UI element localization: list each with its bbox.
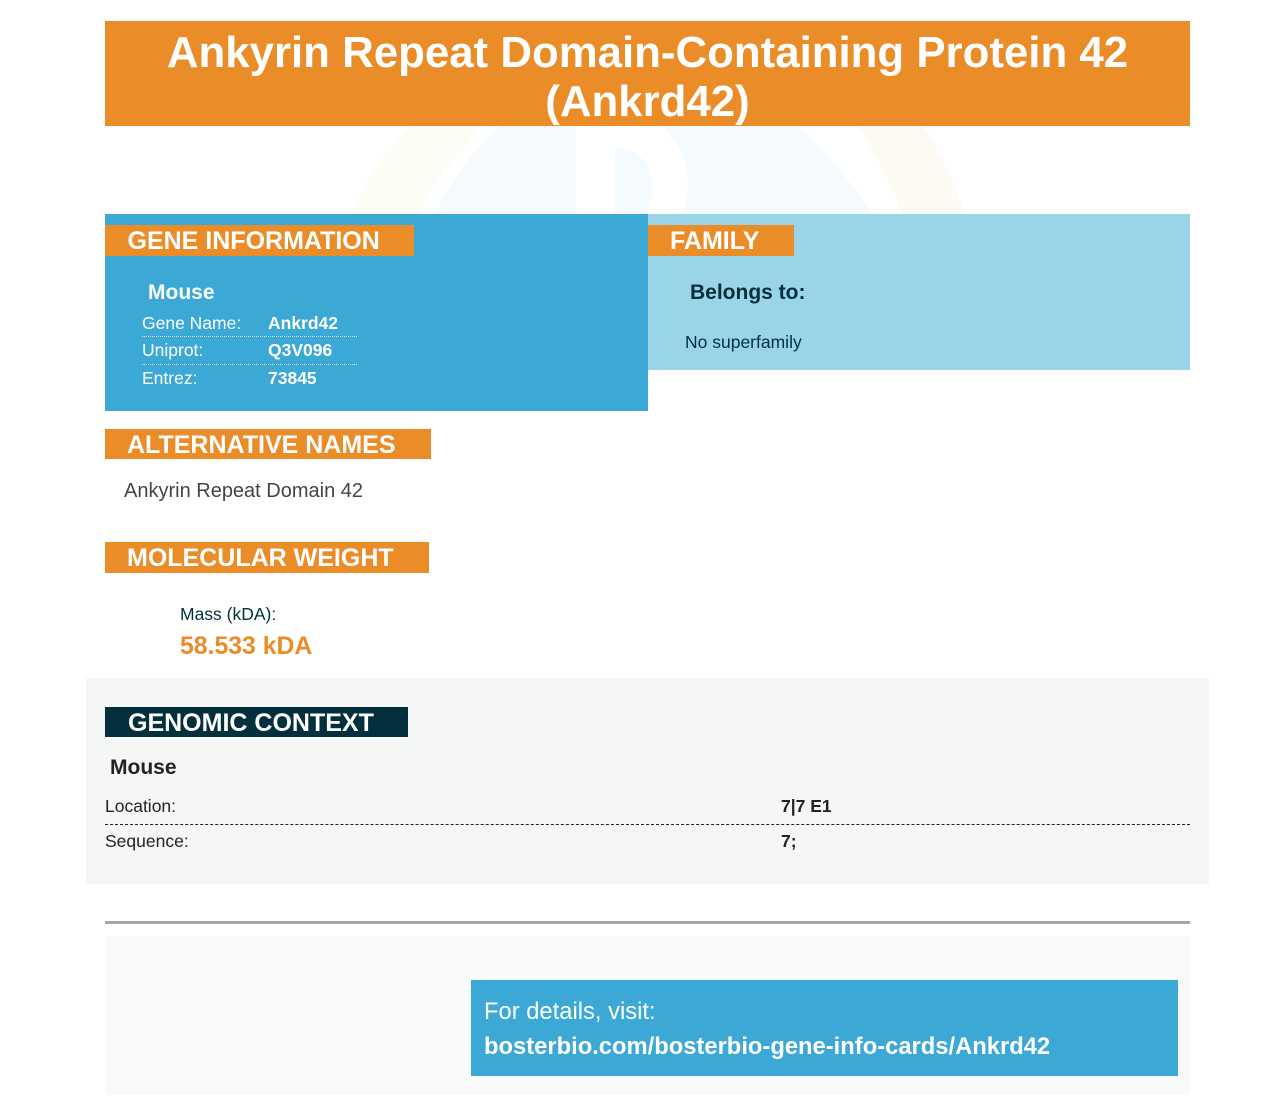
entrez row: Entrez: [142,368,197,388]
sequence row [105,831,797,851]
heading: family [648,225,794,256]
location row: 7|7 E1 [781,796,832,816]
uniprot row: Q3V096 [268,340,332,360]
panel: footer [105,936,1190,1095]
location row: Location: [105,796,176,816]
title banner: (Ankrd42) [545,77,750,126]
panel: gene information [105,214,648,411]
alternative names text: Ankyrin Repeat Domain 42 [124,480,363,502]
species label: Mouse [110,756,177,779]
gene name row: Gene Name: [142,313,241,333]
watermark logo [350,126,965,214]
heading: family: FAMILY [670,227,759,255]
gene name row [142,310,357,337]
sequence row: Sequence: [105,831,189,851]
details label: For details, visit: [484,998,656,1025]
sequence row: 7; [781,831,797,851]
entrez row [142,368,317,388]
uniprot row [142,337,357,365]
superfamily text: No superfamily [685,332,802,352]
belongs to label: Belongs to: [690,281,806,304]
heading: gene information: GENE INFORMATION [128,227,380,255]
panel: family [648,214,1190,370]
details url: bosterbio.com/bosterbio-gene-info-cards/Ankrd42 [484,1033,1050,1060]
entrez row: 73845 [268,368,317,388]
mass label: Mass (kDA): [180,604,276,624]
heading: genomic context: GENOMIC CONTEXT [128,709,374,737]
location row [105,790,1190,825]
gene name row: Ankrd42 [268,313,338,333]
heading: alternative names: ALTERNATIVE NAMES [127,431,396,459]
panel: genomic context [86,678,1209,884]
callout: details link [471,980,1178,1076]
mass value: 58.533 kDA [180,633,312,660]
species label: Mouse [148,281,215,304]
title banner [105,21,1190,126]
heading: molecular weight: MOLECULAR WEIGHT [127,544,394,572]
title banner: Ankyrin Repeat Domain-Containing Protein 42 [167,28,1128,77]
uniprot row: Uniprot: [142,340,203,360]
